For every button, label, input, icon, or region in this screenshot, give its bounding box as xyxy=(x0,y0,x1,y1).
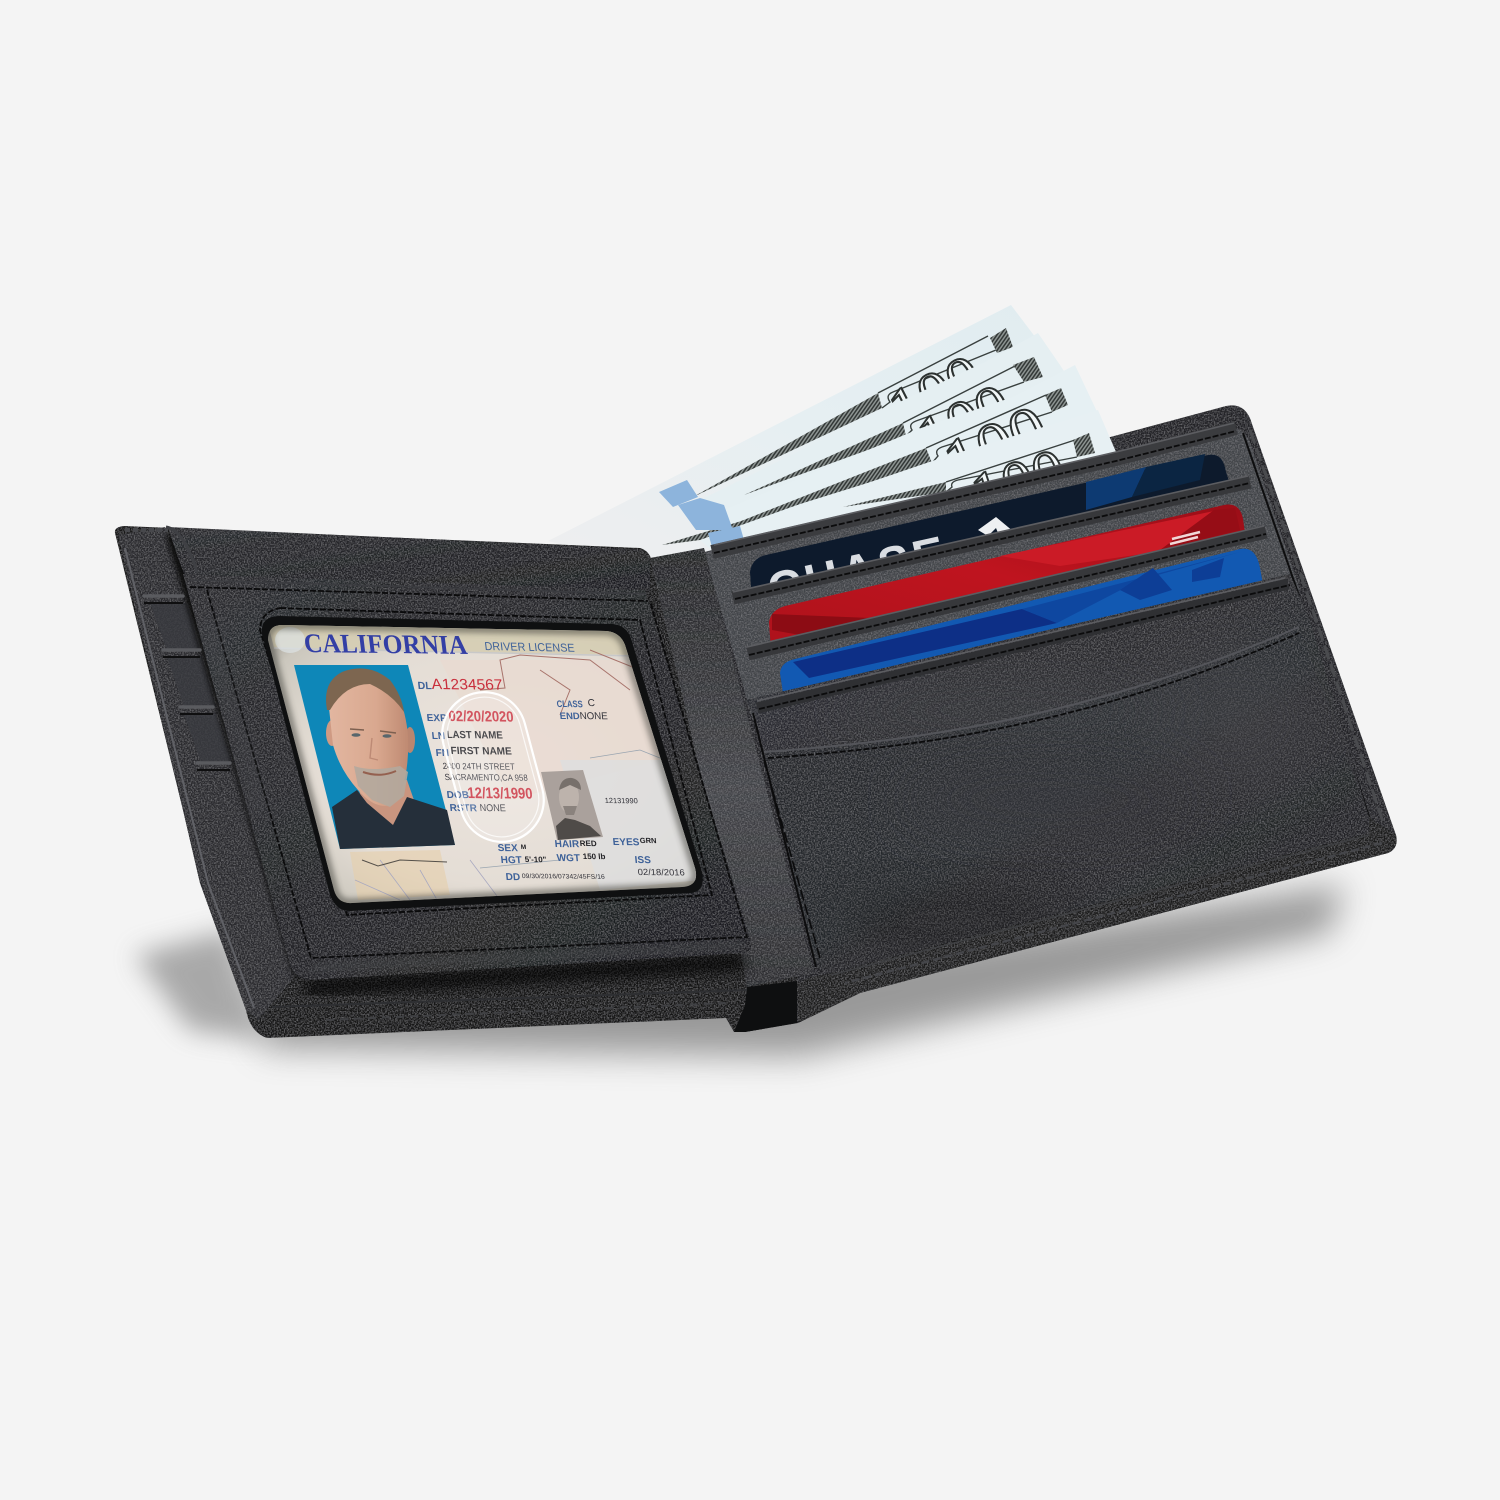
license data text: HGT xyxy=(500,855,523,866)
panel: ID window flap xyxy=(183,574,751,980)
license data text: NONE xyxy=(579,711,609,722)
hinge fold lower xyxy=(734,981,797,1032)
top rim ridges of right panel xyxy=(712,423,1236,553)
document title: DRIVER LICENSE xyxy=(484,641,576,655)
curved pocket seam xyxy=(764,627,1299,752)
bill 4: 100 xyxy=(962,434,1075,531)
license data text: EXP xyxy=(426,713,448,724)
license data text: DOB xyxy=(446,790,470,801)
pocket 1 xyxy=(730,476,1272,690)
license data text: LAST NAME xyxy=(446,729,503,742)
license data text: 02/18/2016 xyxy=(637,867,685,877)
license data text: DL xyxy=(417,680,433,692)
license data text: LN xyxy=(431,731,446,742)
pocket shading xyxy=(820,650,1320,954)
license data text: GRN xyxy=(639,836,657,845)
portrait photo xyxy=(294,665,455,849)
license data text: 02/20/2020 xyxy=(448,708,514,726)
bill 3 xyxy=(700,365,1116,565)
hinge xyxy=(650,548,814,987)
license data text: C xyxy=(587,698,596,709)
left pocket seam xyxy=(753,713,816,967)
license data text: A1234567 xyxy=(431,676,503,694)
license data text: RED xyxy=(579,839,597,848)
state name: CALIFORNIA xyxy=(302,628,469,660)
license data text: 09/30/2016/07342/45FS/16 xyxy=(522,873,606,881)
cast shadow xyxy=(135,885,1345,1056)
panel: right card-slot leather xyxy=(704,428,1300,720)
license data text: 2400 24TH STREET xyxy=(442,761,516,772)
bill 4 xyxy=(662,410,1116,570)
card base xyxy=(268,625,696,903)
bill 1 xyxy=(548,305,1116,565)
license data text: ISS xyxy=(634,855,652,866)
license data text: 12131990 xyxy=(604,796,638,805)
license data text: EYES xyxy=(612,837,640,848)
license data text: RSTR xyxy=(449,803,478,814)
wallet: back shell of right panel xyxy=(700,405,1397,1032)
right panel side rim xyxy=(1243,430,1384,825)
panel: left back shell xyxy=(115,526,800,1038)
license data text: SACRAMENTO,CA 958 xyxy=(444,772,528,783)
card artwork xyxy=(268,624,700,905)
card logo xyxy=(978,517,1014,538)
credit card: blue xyxy=(780,549,1264,700)
blue bill edges xyxy=(659,480,744,547)
cash: hundred dollar bills xyxy=(548,305,1116,570)
license data text: DD xyxy=(505,872,521,883)
bill 2: 100 xyxy=(907,371,1021,472)
pocket 3: large lower pocket xyxy=(745,574,1369,973)
bill 1: 100 xyxy=(878,342,993,444)
credit card: red xyxy=(769,505,1246,650)
pocket 2 xyxy=(745,526,1286,740)
license data text: 5'-10" xyxy=(524,855,547,864)
left panel top strap xyxy=(166,527,650,594)
license data text: 150 lb xyxy=(582,852,606,861)
license data text: SEX xyxy=(497,843,519,854)
license data text: END xyxy=(559,711,580,722)
portrait head xyxy=(326,668,415,807)
ghost photo xyxy=(541,770,603,840)
bill 3: 100 xyxy=(932,390,1059,502)
license data text: CLASS xyxy=(556,699,583,710)
window vignette xyxy=(268,625,696,903)
license data text: FIRST NAME xyxy=(450,745,512,758)
lower band stitching xyxy=(272,962,747,1020)
left card-slot strip xyxy=(118,527,300,1020)
right panel bottom rim xyxy=(797,817,1397,1023)
lower pocket below curved seam xyxy=(764,627,1369,973)
credit card: Chase xyxy=(750,454,1232,618)
license data text xyxy=(417,676,685,883)
card brand text: CHASE xyxy=(763,526,953,618)
license data text: 12/13/1990 xyxy=(467,785,533,803)
license data text: M xyxy=(521,844,527,851)
ID card: California driver license xyxy=(268,624,700,905)
bill 2 xyxy=(690,333,1116,565)
license data text: FN xyxy=(435,748,450,759)
hologram oval xyxy=(433,683,553,851)
license data text: HAIR xyxy=(554,839,580,850)
license data text: NONE xyxy=(479,803,507,814)
license data text: WGT xyxy=(556,853,581,864)
